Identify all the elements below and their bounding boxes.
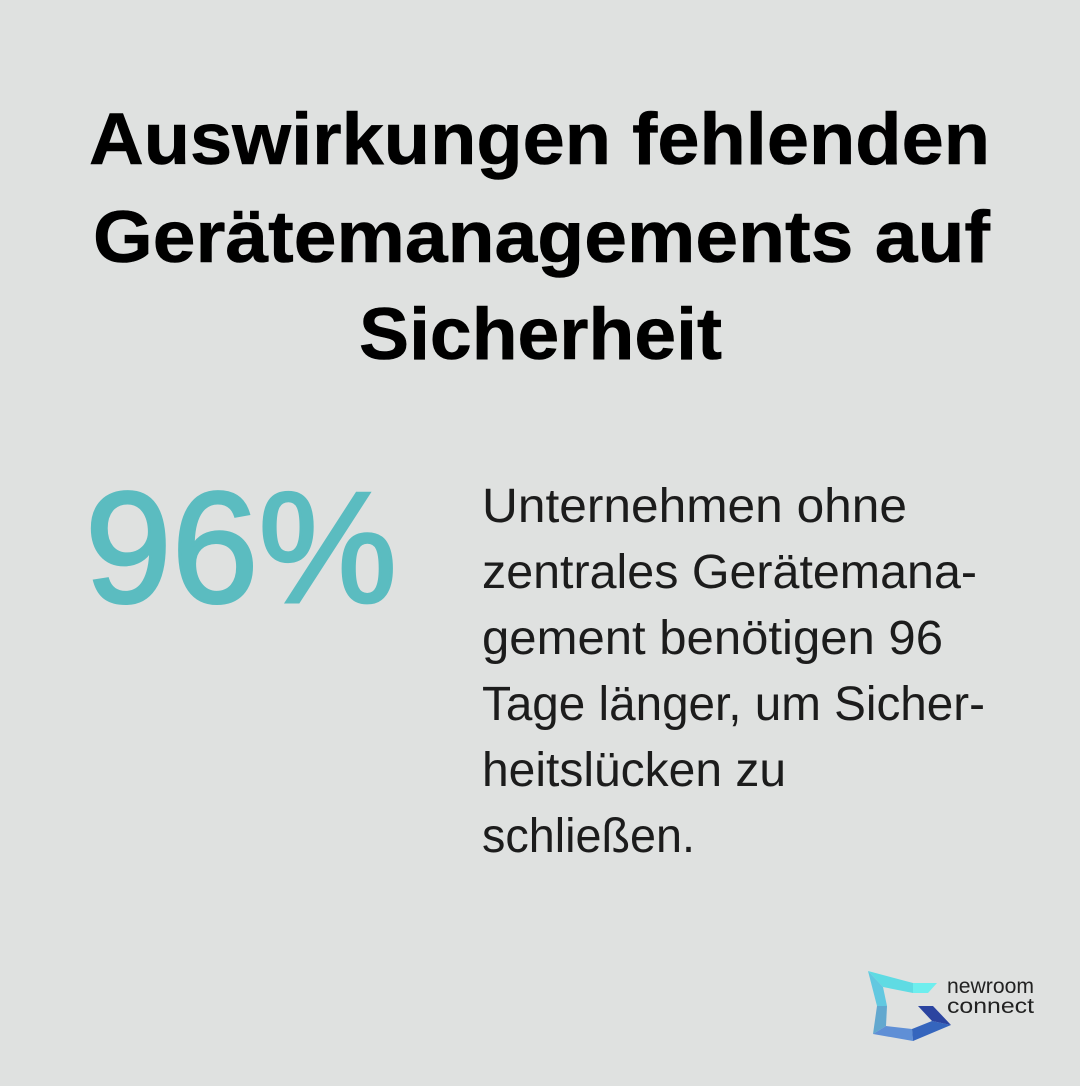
logo wordmark: connect [947, 995, 1034, 1018]
description text: Tage länger, um Sicher- [482, 678, 985, 731]
title: Auswirkungen fehlenden [89, 99, 990, 180]
description text: Unternehmen ohne [482, 480, 907, 533]
description text: zentrales Gerätemana- [482, 546, 977, 599]
description text: schließen. [482, 810, 695, 863]
title [89, 99, 991, 375]
icon: logo mark [868, 971, 951, 1041]
description text: heitslücken zu [482, 744, 786, 797]
title: Gerätemanagements auf [93, 197, 991, 278]
description text: gement benötigen 96 [482, 612, 943, 665]
logo: newroom connect [868, 971, 1034, 1041]
logo wordmark: newroom [947, 975, 1034, 998]
title: Sicherheit [359, 294, 722, 375]
logo wordmark [947, 975, 1034, 1018]
big statistic: 96%: 96% [85, 460, 397, 636]
description text [482, 480, 985, 863]
